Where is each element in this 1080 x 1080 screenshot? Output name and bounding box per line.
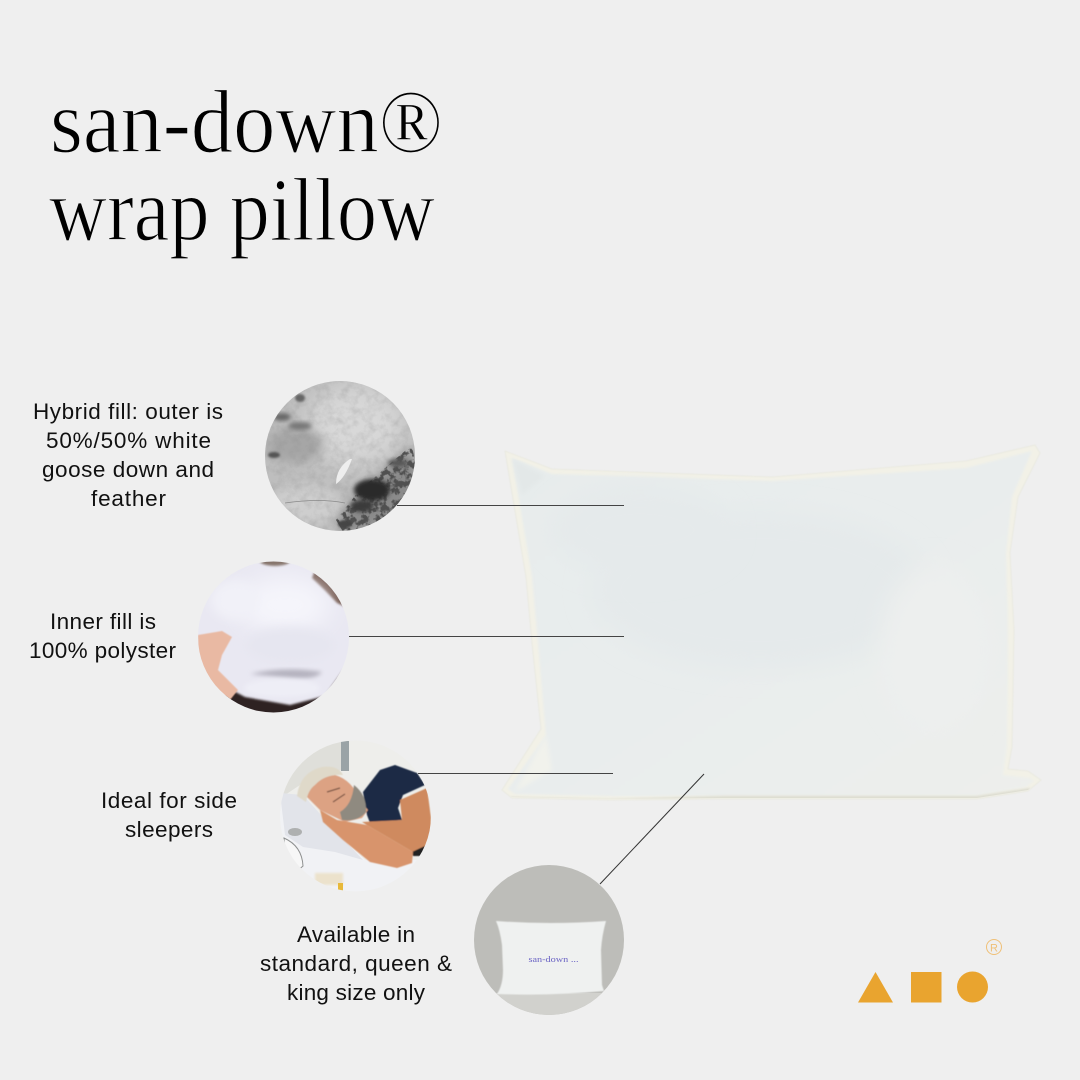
text: inner fill: 100% polyster bbox=[29, 638, 176, 663]
leader line: side sleepers bbox=[418, 772, 613, 774]
brand logo: R bbox=[990, 942, 998, 954]
leader line: sizes bbox=[600, 774, 704, 884]
text: sizes: standard, queen & bbox=[260, 951, 452, 976]
text: hybrid fill bbox=[33, 399, 223, 511]
text: hybrid fill: goose down and bbox=[42, 457, 214, 482]
text: side sleepers bbox=[101, 788, 237, 842]
text: side sleepers: sleepers bbox=[125, 817, 213, 842]
text: hybrid fill: 50%/50% white bbox=[46, 428, 211, 453]
photo circle: man sleeping on his side bbox=[280, 740, 432, 892]
text: sizes: king size only bbox=[287, 980, 426, 1005]
photo circle: polyester fill in hand bbox=[198, 562, 346, 712]
leader line: hybrid fill bbox=[397, 504, 624, 506]
title bbox=[49, 73, 443, 260]
title: san-down® bbox=[50, 73, 443, 172]
text: inner fill bbox=[29, 609, 176, 663]
leader line: inner fill bbox=[349, 636, 624, 638]
text: hybrid fill: feather bbox=[91, 486, 166, 511]
label on pillow: san-down ... bbox=[528, 955, 578, 964]
text: sizes: Available in bbox=[297, 922, 415, 947]
text: inner fill: Inner fill is bbox=[50, 609, 156, 634]
brand logo bbox=[858, 940, 1002, 1002]
photo circle: pillow with san-down label bbox=[474, 865, 624, 1015]
text: hybrid fill: Hybrid fill: outer is bbox=[33, 399, 223, 424]
title: wrap pillow bbox=[49, 161, 435, 260]
pillow product photo bbox=[502, 445, 1041, 800]
text: side sleepers: Ideal for side bbox=[101, 788, 237, 813]
text: sizes bbox=[260, 922, 452, 1005]
photo circle: down and feather fill bbox=[265, 381, 425, 535]
